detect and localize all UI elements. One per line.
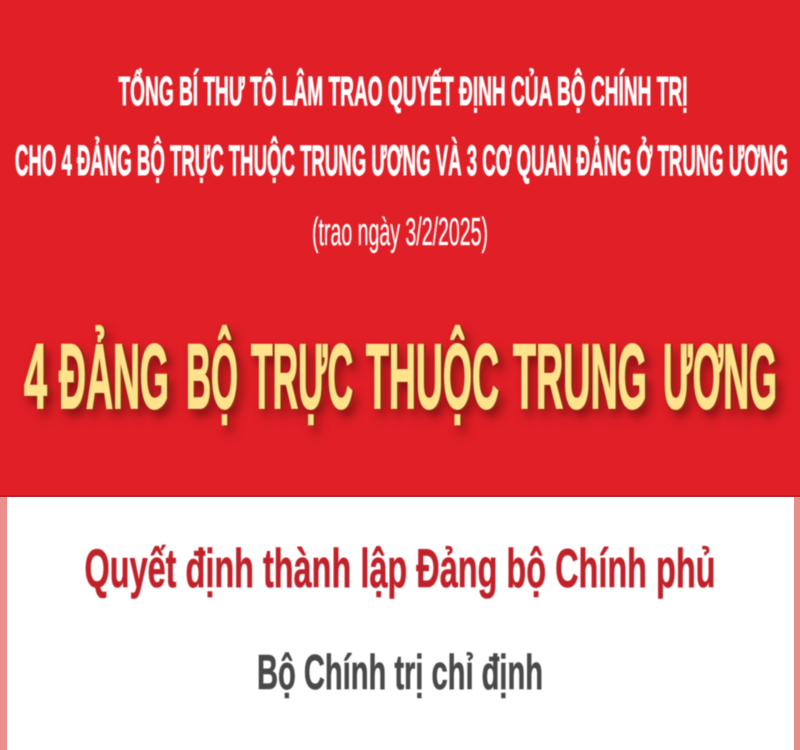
main heading: 4 — [24, 326, 47, 428]
panel: white content — [0, 497, 800, 750]
main heading: THUỘC — [366, 325, 499, 428]
date note: (trao ngày 3/2/2025) — [312, 211, 488, 254]
main heading: TRỰC — [251, 326, 353, 428]
main heading: BỘ — [186, 325, 238, 428]
body text: Bộ Chính trị chỉ định — [257, 646, 543, 700]
left border — [0, 497, 7, 750]
main heading: ĐẢNG — [59, 325, 169, 428]
panel: red header — [0, 0, 800, 497]
main heading — [24, 325, 777, 428]
right border — [794, 497, 800, 750]
